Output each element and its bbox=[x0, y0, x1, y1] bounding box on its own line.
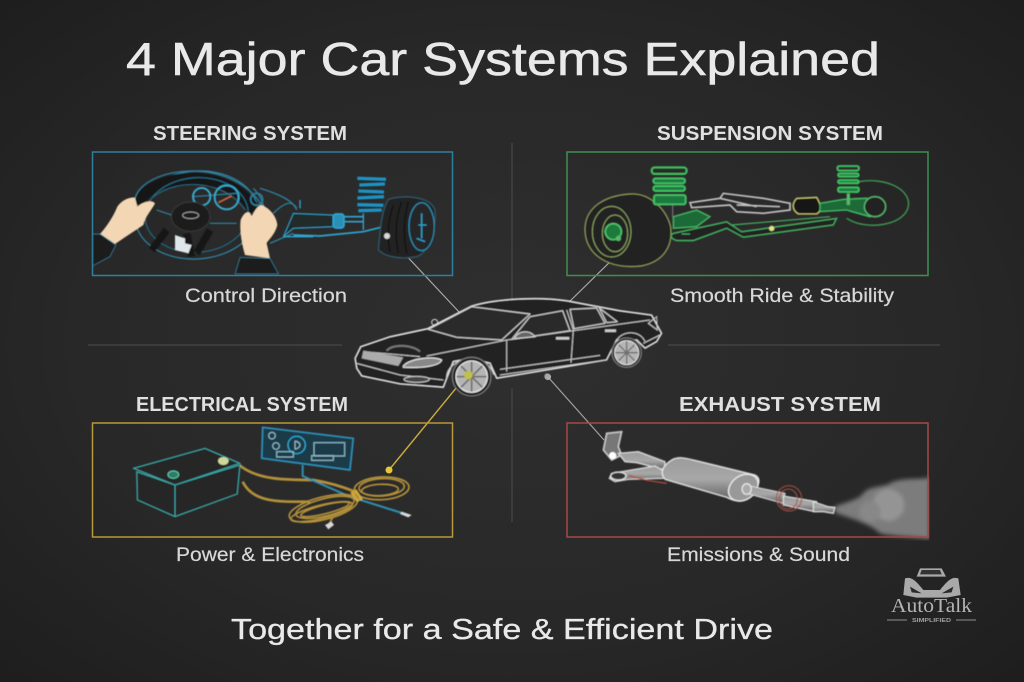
left coil spring bbox=[652, 167, 687, 204]
connector: exhaust to car bbox=[545, 374, 604, 440]
panel: steering system bbox=[92, 123, 452, 307]
right coil spring bbox=[837, 166, 859, 192]
caption: smooth ride and stability: Smooth Ride & Stability bbox=[670, 285, 894, 307]
car body bbox=[355, 299, 662, 387]
heading: exhaust system: EXHAUST SYSTEM bbox=[679, 394, 881, 416]
battery bbox=[133, 448, 240, 517]
connector: electrical to car bbox=[386, 376, 466, 474]
illustration: exhaust pipe and muffler bbox=[603, 432, 930, 539]
steering rack bbox=[283, 200, 383, 237]
frame: steering panel bbox=[92, 152, 452, 276]
upper link bbox=[690, 193, 790, 213]
heading: steering system: STEERING SYSTEM bbox=[153, 123, 347, 145]
windows bbox=[428, 307, 617, 340]
body lines bbox=[357, 310, 660, 380]
right wheel bbox=[847, 181, 909, 225]
illustration: suspension assembly bbox=[585, 166, 909, 267]
muffler bbox=[662, 458, 759, 501]
brand name: AutoTalk bbox=[891, 595, 972, 617]
front wheel bbox=[452, 357, 491, 396]
connector: steering to car bbox=[384, 232, 460, 313]
right hand bbox=[240, 205, 277, 258]
tyre bbox=[378, 197, 435, 258]
left wheel bbox=[585, 194, 671, 267]
inlet pipes bbox=[603, 432, 622, 460]
panel: exhaust system bbox=[567, 394, 930, 566]
caption: emissions and sound: Emissions & Sound bbox=[667, 544, 850, 566]
sleeves bbox=[93, 234, 279, 274]
coil spring bbox=[357, 178, 386, 211]
steering wheel bbox=[132, 167, 297, 263]
frame: exhaust panel bbox=[567, 423, 928, 537]
heading: electrical system: ELECTRICAL SYSTEM bbox=[136, 394, 348, 416]
tail pipe bbox=[745, 485, 785, 503]
signal cable bbox=[303, 465, 408, 515]
grille and headlights bbox=[362, 351, 403, 366]
caption: control direction: Control Direction bbox=[185, 285, 347, 307]
frame: electrical panel bbox=[92, 423, 452, 537]
tagline rule bbox=[887, 619, 976, 621]
illustration: battery, controls and wiring bbox=[133, 427, 412, 529]
left hand bbox=[100, 197, 155, 244]
icon: car front bbox=[903, 568, 961, 598]
caption: power and electronics: Power & Electronics bbox=[176, 544, 364, 566]
central car illustration bbox=[355, 299, 662, 396]
panel: suspension system bbox=[567, 123, 928, 307]
footer tagline: Together for a Safe & Efficient Drive bbox=[231, 614, 773, 646]
damper bbox=[793, 197, 820, 214]
heading: suspension system: SUSPENSION SYSTEM bbox=[657, 123, 883, 145]
wires bbox=[239, 465, 355, 502]
frame: suspension panel bbox=[567, 152, 928, 276]
knuckle bbox=[673, 210, 710, 228]
rear wheel bbox=[612, 338, 641, 367]
control panel bbox=[262, 427, 353, 470]
connector: suspension to car bbox=[565, 252, 620, 306]
panel: electrical system bbox=[92, 394, 452, 566]
logo: AutoTalk Simplified bbox=[887, 568, 976, 624]
smoke cloud bbox=[835, 477, 930, 539]
wire coil bbox=[287, 476, 410, 528]
control arm bbox=[671, 218, 837, 241]
illustration: steering wheel, hands and rack bbox=[93, 167, 435, 274]
sub brand: SIMPLIFIED bbox=[912, 618, 951, 624]
title: 4 Major Car Systems Explained bbox=[126, 33, 880, 85]
